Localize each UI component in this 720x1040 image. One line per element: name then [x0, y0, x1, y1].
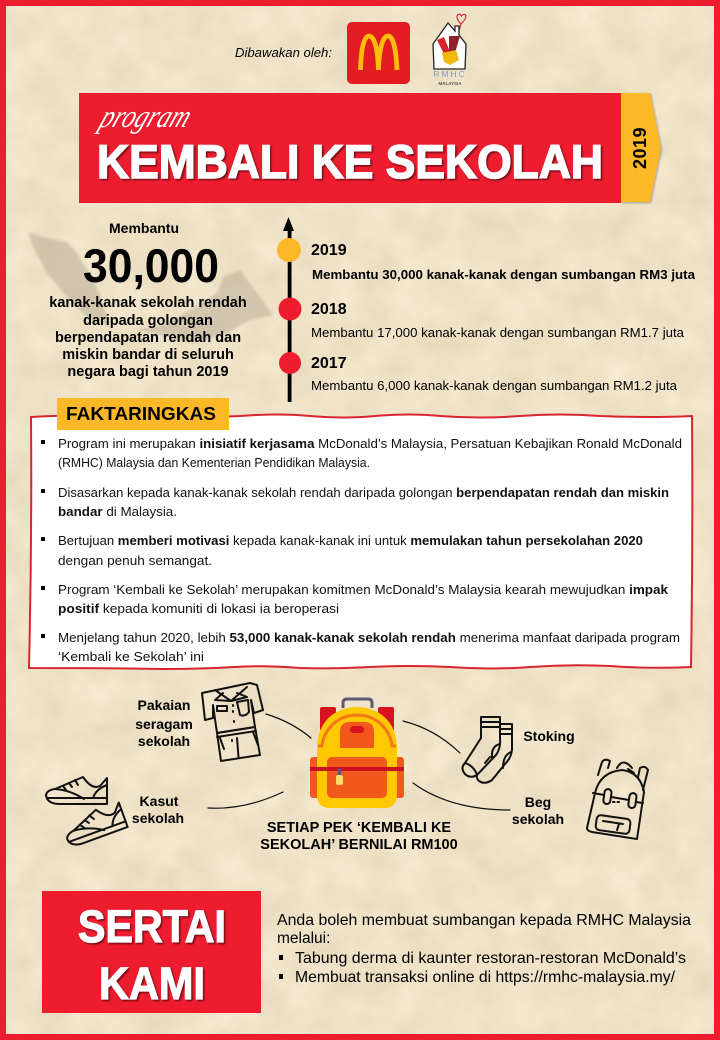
panel heading: [57, 398, 229, 430]
label: uniform: sekolah: [138, 733, 190, 749]
headline stat: helping 30,000 children: 30,000: [83, 239, 219, 292]
headline stat: helping 30,000 children: miskin bandar di seluruh: [62, 347, 234, 363]
label: school bag: Beg: [525, 794, 551, 810]
label: uniform: seragam: [135, 716, 193, 732]
connector: backpack to socks: [403, 721, 460, 753]
fact 1: Program ini merupakan inisiatif kerjasama McDonald’s Malaysia, Persatuan Kebajikan Ronald McDonald: [58, 437, 682, 451]
fact 4: Program ‘Kembali ke Sekolah’ merupakan komitmen McDonald’s Malaysia kearah mewujudkan impak: [58, 583, 668, 597]
2019 entry: Membantu 30,000 kanak-kanak dengan sumbangan RM3 juta: [312, 267, 696, 282]
pack value caption: [260, 820, 458, 853]
label: shoes: sekolah: [132, 810, 184, 826]
2017 entry: 2017: [311, 355, 347, 372]
icon: school uniform: [202, 683, 263, 761]
2018 entry: [278, 298, 685, 340]
donation instructions: Anda boleh membuat sumbangan kepada RMHC Malaysia: [277, 912, 691, 929]
label: school bag: [512, 794, 564, 827]
fact 2: Disasarkan kepada kanak-kanak sekolah rendah daripada golongan berpendapatan rendah dan miskin: [58, 486, 669, 500]
donation instructions: Tabung derma di kaunter restoran-restoran McDonald’s: [295, 950, 686, 967]
panel: join us: KAMI: [99, 958, 205, 1009]
panel: join us: SERTAI: [78, 901, 226, 952]
donation instructions: melalui:: [277, 930, 330, 947]
fact 3: dengan penuh semangat.: [58, 554, 212, 568]
icon: McDonald's logo: [347, 22, 410, 84]
year tab: [621, 93, 661, 202]
map of Malaysia watermark: [28, 232, 273, 343]
program script word: program: [93, 99, 197, 135]
connector: backpack to school bag: [413, 783, 510, 810]
fact 4: positif kepada komuniti di lokasi ia beroperasi: [58, 602, 339, 616]
2019 entry: [277, 238, 696, 282]
icon: outline school bag: [587, 760, 648, 839]
label: school bag: sekolah: [512, 811, 564, 827]
donation instructions: [277, 912, 691, 986]
pack value caption: SEKOLAH’ BERNILAI RM100: [260, 837, 458, 853]
fact 1: (RMHC) Malaysia dan Kementerian Pendidikan Malaysia.: [58, 456, 370, 470]
fact 3: [41, 534, 643, 568]
icon: yellow backpack: [310, 699, 404, 808]
2017 entry: [279, 352, 678, 393]
2017 entry: Membantu 6,000 kanak-kanak dengan sumbangan RM1.2 juta: [311, 378, 678, 393]
fact 2: [41, 486, 669, 519]
fact 5: ‘Kembali ke Sekolah’ ini: [58, 650, 204, 664]
headline stat: helping 30,000 children: Membantu: [109, 220, 179, 236]
year tab: 2019: [630, 127, 650, 169]
panel: quick facts: [29, 398, 692, 669]
second shoe: [61, 802, 128, 848]
panel wavy frame: [29, 414, 692, 669]
timeline axis arrow: [283, 217, 294, 402]
icon: RMHC Malaysia logo: MALAYSIA: [438, 81, 462, 86]
label: socks: Stoking: [523, 728, 575, 744]
label: shoes: [132, 793, 184, 826]
headline stat: helping 30,000 children: negara bagi tahun 2019: [67, 364, 229, 380]
pack value caption: SETIAP PEK ‘KEMBALI KE: [267, 820, 451, 836]
timeline: [277, 217, 696, 402]
icon: school shoes: [46, 777, 128, 848]
icon: RMHC Malaysia logo: RMHC: [433, 69, 467, 79]
fact 2: bandar di Malaysia.: [58, 505, 177, 519]
fact 5: Menjelang tahun 2020, lebih 53,000 kanak-kanak sekolah rendah menerima manfaat daripada program: [58, 631, 680, 645]
fact 5: [41, 631, 680, 664]
connector: shoes to backpack: [208, 792, 283, 808]
panel: join us: [42, 891, 261, 1013]
label: shoes: Kasut: [140, 793, 179, 809]
donation instructions: Membuat transaksi online di https://rmhc-malaysia.my/: [295, 969, 676, 986]
item labels: [132, 697, 575, 827]
presented by line: Dibawakan oleh:: [235, 45, 332, 60]
fact 3: Bertujuan memberi motivasi kepada kanak-kanak ini untuk memulakan tahun persekolahan 2020: [58, 534, 643, 548]
2018 entry: 2018: [311, 301, 347, 318]
panel heading: FAKTARINGKAS: [66, 404, 216, 424]
headline stat: helping 30,000 children: [49, 220, 247, 380]
icon: RMHC Malaysia logo: [433, 14, 467, 86]
2018 entry: Membantu 17,000 kanak-kanak dengan sumbangan RM1.7 juta: [311, 325, 685, 340]
icon: socks: [462, 717, 512, 783]
title banner: [79, 93, 661, 203]
headline stat: helping 30,000 children: berpendapatan rendah dan: [55, 330, 241, 346]
fact 4: [41, 583, 668, 616]
headline stat: helping 30,000 children: kanak-kanak sekolah rendah: [49, 295, 247, 311]
main title: KEMBALI KE SEKOLAH: [97, 135, 603, 188]
fact 1: [41, 437, 682, 470]
first shoe: [46, 777, 107, 804]
connector: uniform to backpack: [266, 714, 311, 738]
headline stat: helping 30,000 children: daripada golongan: [83, 313, 213, 329]
2019 entry: 2019: [311, 242, 347, 259]
label: uniform: Pakaian: [138, 697, 190, 713]
label: uniform: [135, 697, 193, 749]
